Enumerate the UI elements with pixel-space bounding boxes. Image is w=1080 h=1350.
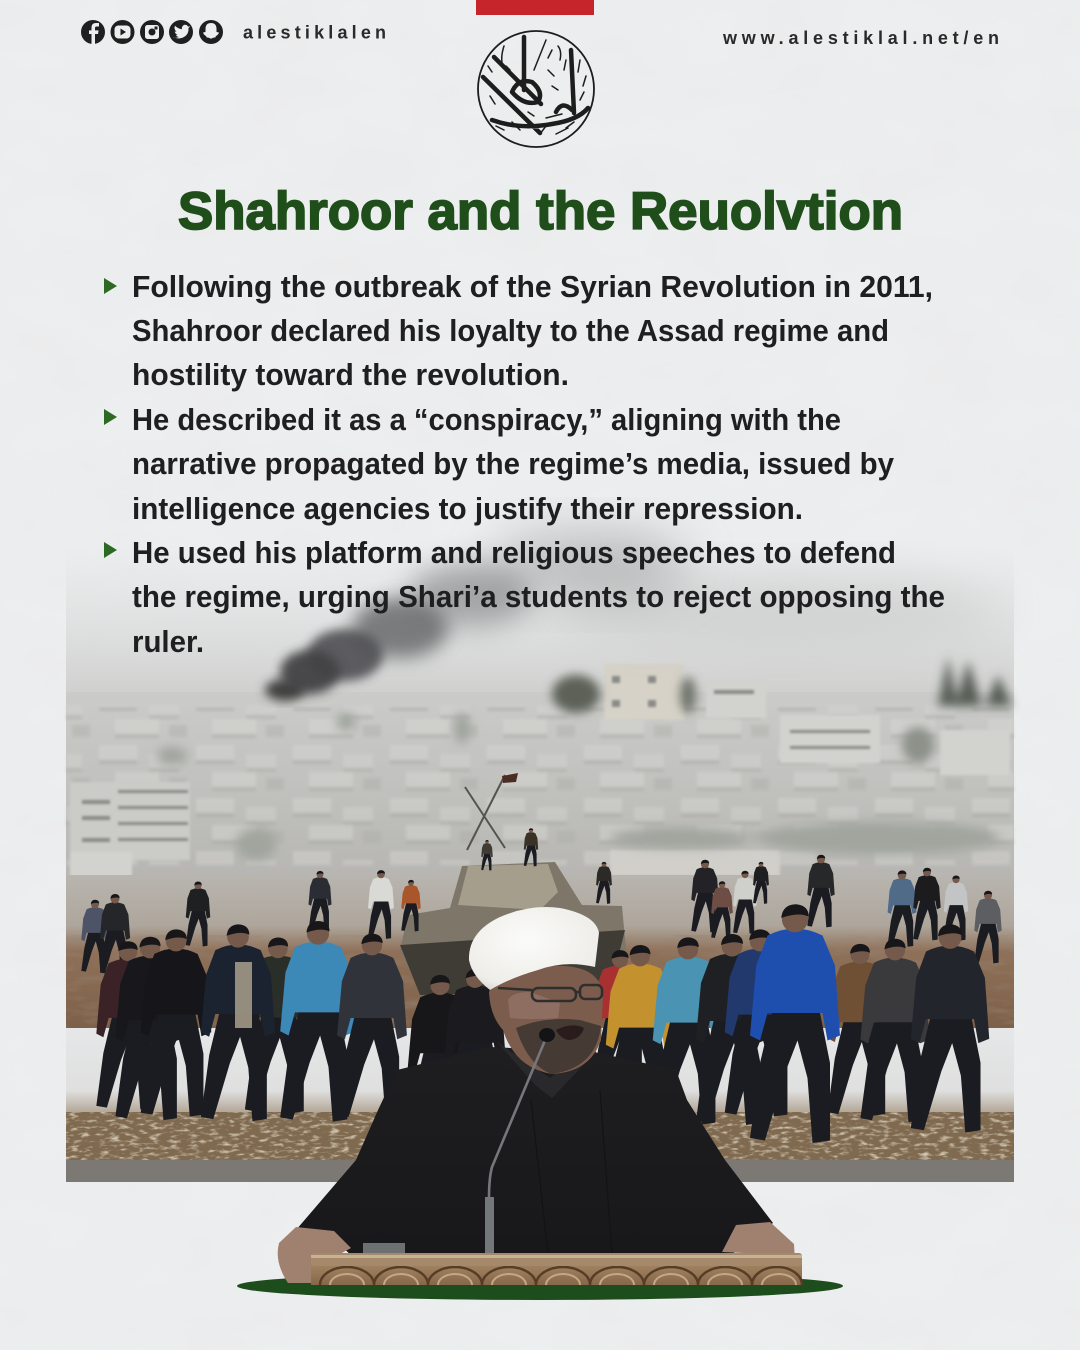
glass on podium (363, 1243, 405, 1255)
icon: youtube (110, 20, 134, 44)
face (489, 966, 603, 1074)
left hand (278, 1227, 351, 1283)
bullet 1: hostility toward the revolution. (132, 357, 569, 392)
haze strip (66, 1028, 1014, 1120)
collar (497, 1042, 596, 1098)
website url: www.alestiklal.net/en (722, 28, 999, 48)
social icons (81, 20, 223, 44)
glasses (498, 985, 602, 1001)
podium (311, 1253, 802, 1285)
icon: snapchat (199, 20, 223, 44)
social handle: alestiklalen (243, 22, 386, 42)
green ellipse base (237, 1272, 843, 1300)
bullet 1 (104, 269, 933, 392)
turban (469, 907, 599, 990)
grey band (66, 1160, 1014, 1182)
smoke plume (265, 531, 1000, 701)
bullet 2: He described it as a “conspiracy,” aligning with the (132, 402, 841, 437)
sky (66, 545, 1014, 695)
background photo: war scene (66, 531, 1014, 1182)
red top tab (476, 0, 594, 15)
distant crowd (81, 855, 1002, 974)
bullet 3: the regime, urging Shari’a students to reject opposing the (132, 579, 945, 614)
tank (400, 773, 626, 995)
foreground crowd (96, 904, 989, 1147)
logo: calligraphy seal (478, 31, 594, 147)
icon: facebook (81, 20, 105, 44)
robe (296, 1047, 773, 1256)
bullet list (104, 269, 945, 659)
bullet 2 (104, 402, 895, 526)
bullet 3 (104, 535, 945, 659)
speaker figure (278, 907, 795, 1283)
right hand (722, 1222, 795, 1277)
microphone (485, 1028, 555, 1253)
bullet 1: Following the outbreak of the Syrian Revolution in 2011, (132, 269, 933, 304)
ground (66, 875, 1014, 1028)
bullet 2: narrative propagated by the regime’s media, issued by (132, 446, 895, 481)
bullet 3: He used his platform and religious speeches to defend (132, 535, 896, 570)
stubble field (66, 1112, 1014, 1160)
bullet 1: Shahroor declared his loyalty to the Assad regime and (132, 313, 889, 348)
icon: instagram (140, 20, 164, 44)
town (66, 656, 1014, 890)
bullet 3: ruler. (132, 624, 204, 659)
title: Shahroor and the Reuolvtion (178, 182, 903, 241)
icon: twitter (169, 20, 193, 44)
bullet 2: intelligence agencies to justify their repression. (132, 491, 803, 526)
